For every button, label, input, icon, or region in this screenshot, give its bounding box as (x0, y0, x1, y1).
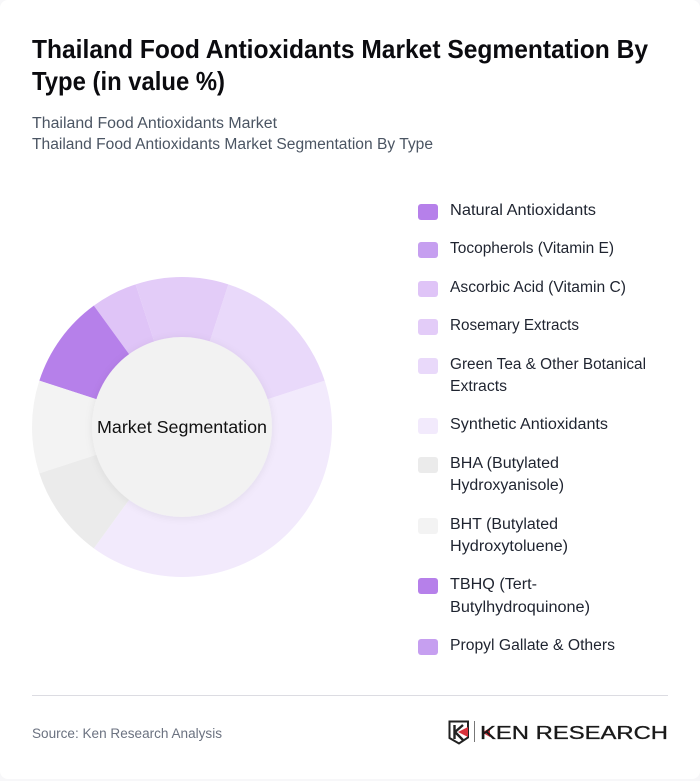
segment: BHA (39, 427, 182, 548)
legend item: Natural Antioxidants: Natural Antioxidants (450, 202, 596, 219)
center label: Market Segmentation (97, 417, 267, 437)
legend item: Propyl Gallate: Propyl Gallate & Others (450, 637, 615, 654)
legend item: BHT: Hydroxytoluene) (450, 538, 568, 555)
legend item: TBHQ (418, 576, 590, 616)
subtitle: Thailand Food Antioxidants Market Segmentation By Type (32, 136, 433, 153)
legend item: Green Tea: Extracts (450, 378, 507, 395)
donut chart (32, 277, 332, 577)
legend item: Green Tea: Green Tea & Other Botanical (450, 356, 646, 373)
subtitle (32, 115, 433, 153)
legend item: BHT: BHT (Butylated (450, 516, 558, 533)
segment: Synthetic Antioxidants (94, 381, 332, 577)
legend item: Synthetic Antioxidants: Synthetic Antioxidants (450, 416, 608, 433)
legend item: Ascorbic Acid: Ascorbic Acid (Vitamin C) (450, 279, 626, 296)
segment: TBHQ (39, 306, 182, 427)
legend item: Rosemary Extracts: Rosemary Extracts (450, 317, 579, 334)
legend item: BHA: Hydroxyanisole) (450, 477, 564, 494)
segment: Green Tea (182, 284, 325, 427)
legend (418, 202, 646, 655)
legend item: Tocopherols: Tocopherols (Vitamin E) (450, 240, 614, 257)
legend item: TBHQ: Butylhydroquinone) (450, 599, 590, 616)
legend item: BHT (418, 516, 568, 555)
legend item: BHA: BHA (Butylated (450, 455, 559, 472)
logo: Ken Research: KEN RESEARCH (480, 723, 668, 743)
segment: Ascorbic Acid (94, 284, 182, 427)
center hole (92, 337, 272, 517)
segment: Rosemary Extracts (136, 277, 228, 427)
legend item: BHA (418, 455, 564, 494)
icon: logo shield (450, 722, 468, 744)
title: Type (in value %) (32, 66, 225, 96)
title (32, 34, 649, 96)
subtitle: Thailand Food Antioxidants Market (32, 115, 278, 132)
title: Thailand Food Antioxidants Market Segmentation By (32, 34, 649, 64)
legend item: Green Tea (418, 356, 646, 395)
logo: Ken Research (450, 721, 668, 744)
segment: BHT (32, 381, 182, 473)
legend item: TBHQ: TBHQ (Tert- (450, 576, 537, 593)
source note: Source: Ken Research Analysis (32, 726, 222, 741)
